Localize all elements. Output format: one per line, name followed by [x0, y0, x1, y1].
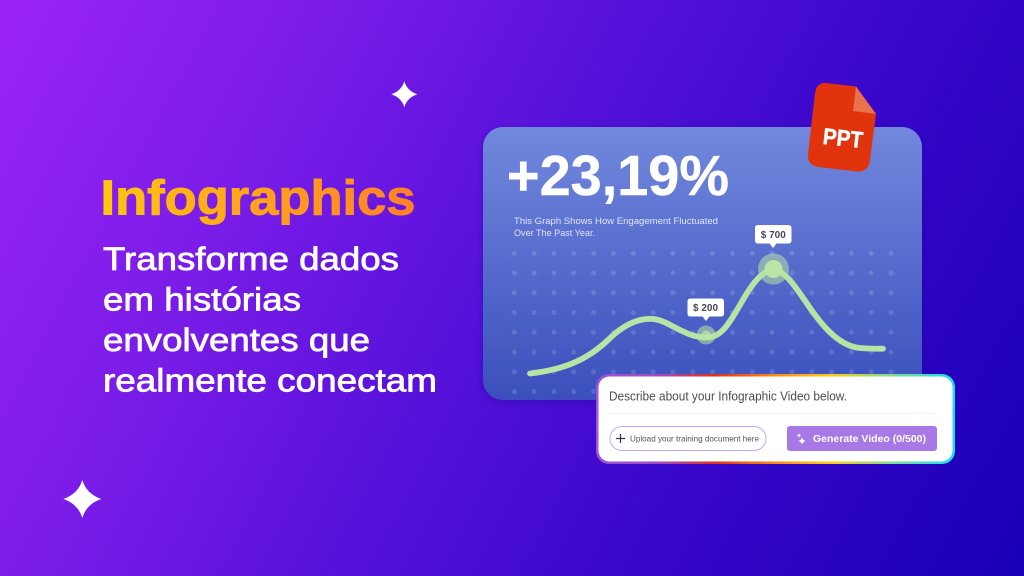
icon: PPT file	[808, 83, 876, 172]
point marker halo	[696, 326, 716, 344]
text block: tagline: realmente conectam	[103, 362, 437, 398]
upload button: Upload your training document here	[630, 434, 759, 444]
graph description: This Graph Shows How Engagement Fluctuated	[514, 216, 718, 227]
icon: PPT file: PPT	[822, 123, 864, 153]
graph description: Over The Past Year.	[514, 228, 595, 239]
text block: tagline: envolventes que	[103, 322, 370, 358]
prompt label: Describe about your Infographic Video below.	[609, 390, 847, 404]
tooltip: $ 200: $ 200	[693, 302, 718, 314]
panel: prompt box	[596, 374, 955, 464]
title: Infographics	[100, 172, 416, 226]
text block: tagline	[103, 241, 437, 398]
upload button	[610, 426, 766, 450]
icon: small sparkle	[391, 81, 417, 107]
text block: tagline: Transforme dados	[103, 241, 399, 277]
peak marker dot	[764, 260, 782, 278]
icon: large sparkle	[63, 480, 101, 518]
tooltip: $ 700: $ 700	[761, 229, 786, 241]
panel: graph card	[483, 127, 922, 401]
tooltip: $ 700	[755, 225, 792, 248]
generate button: Generate Video (0/500)	[813, 433, 926, 445]
generate button	[787, 426, 937, 451]
point marker dot	[702, 330, 710, 340]
line chart	[530, 270, 883, 374]
tooltip: $ 200	[688, 298, 724, 321]
icon: sparkles	[796, 433, 806, 445]
dot grid	[504, 243, 901, 401]
peak marker halo	[758, 254, 789, 284]
graph description	[514, 216, 718, 239]
text block: tagline: em histórias	[103, 282, 301, 318]
big percentage: +23,19%	[507, 144, 729, 208]
